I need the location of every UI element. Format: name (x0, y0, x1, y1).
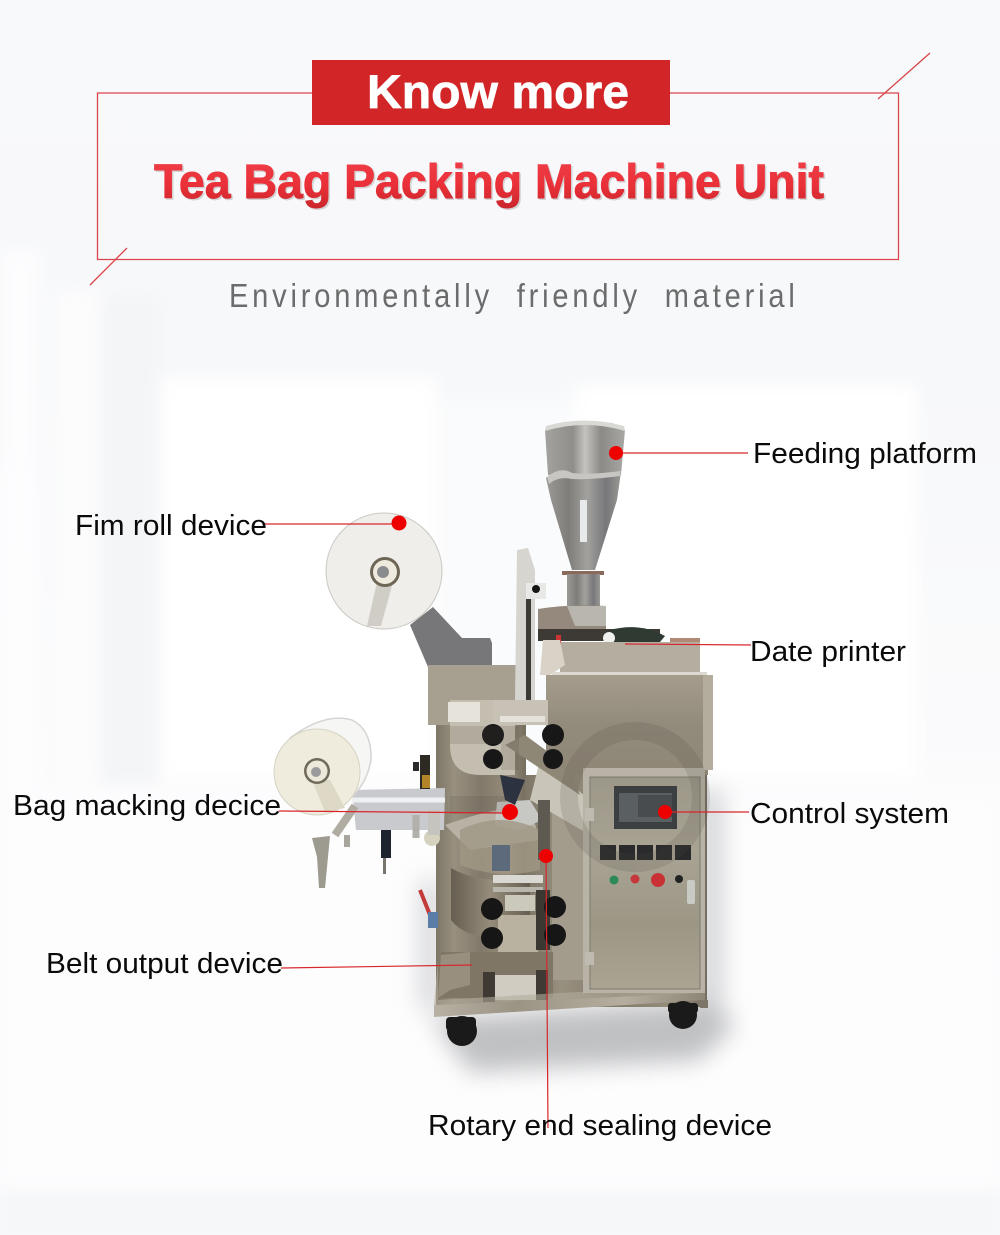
callout: Rotary end sealing device: Rotary end sealing device (428, 1110, 772, 1142)
callout: Feeding platform (609, 438, 977, 470)
temperature controllers (600, 845, 691, 860)
control buttons (610, 873, 695, 904)
badge: Know more (312, 60, 670, 125)
date printer top deck (538, 627, 707, 675)
callout: Fim roll device (75, 510, 406, 542)
main cabinet (428, 665, 713, 1010)
subtitle: Environmentally friendly material (229, 277, 795, 314)
belt output device and base (434, 952, 705, 1017)
upper knobs (482, 724, 564, 769)
callout: Date printer: Date printer (750, 636, 906, 668)
hopper (538, 420, 625, 630)
door hinges (585, 808, 594, 965)
callout: Rotary end sealing device (428, 849, 772, 1142)
film roll 2 and frame (274, 718, 445, 928)
floor shadow (420, 790, 735, 1072)
film roll 1 (326, 513, 492, 667)
callout: Bag macking decice (13, 790, 518, 822)
callout: Belt output device: Belt output device (46, 948, 283, 980)
callout: Belt output device (46, 948, 472, 980)
header frame with corner strokes (90, 53, 930, 285)
callout: Feeding platform: Feeding platform (753, 438, 977, 470)
rotary sealing device and drum (451, 868, 566, 955)
touch screen (614, 786, 677, 829)
callout: Fim roll device: Fim roll device (75, 510, 267, 542)
callout: Control system (658, 798, 949, 830)
translucent logo watermark (450, 731, 701, 863)
title: Tea Bag Packing Machine Unit (154, 156, 824, 209)
title: Tea Bag Packing Machine Unit (156, 158, 826, 210)
control cabinet door (583, 768, 705, 993)
machine photo illustration (274, 420, 735, 1072)
vertical guide column (493, 548, 548, 725)
bag forming device (445, 775, 550, 874)
badge: Know more: Know more (367, 65, 629, 118)
callout: Control system: Control system (750, 798, 949, 830)
callout: Bag macking decice: Bag macking decice (13, 790, 281, 822)
casters (446, 1000, 708, 1046)
